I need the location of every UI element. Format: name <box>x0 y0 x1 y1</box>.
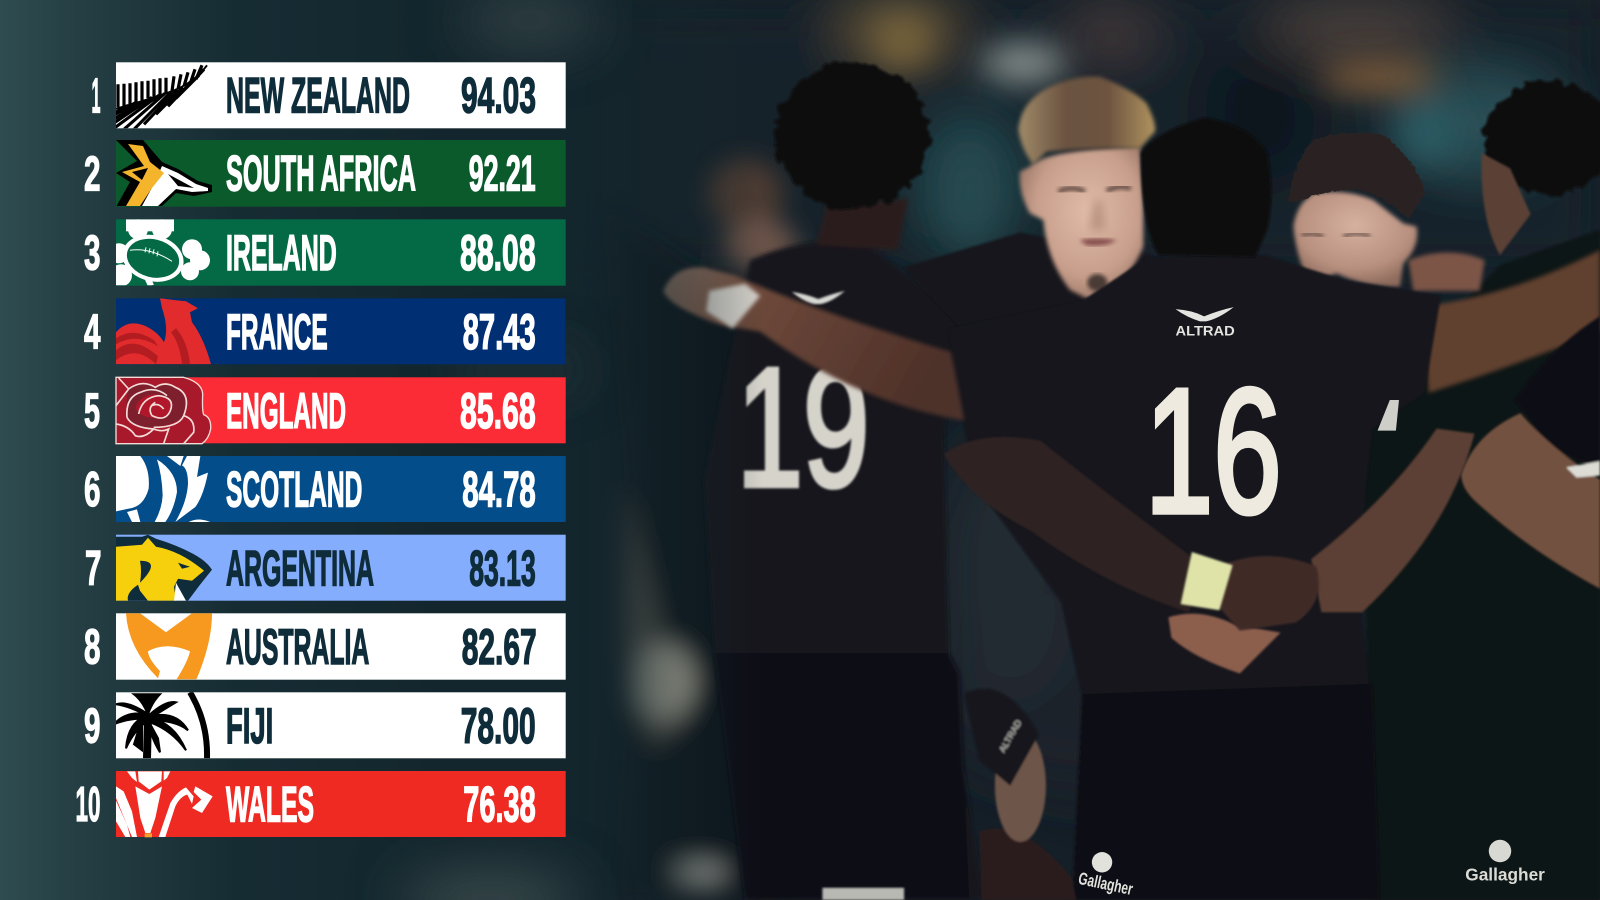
blurred left players <box>602 159 797 900</box>
bar <box>116 771 566 837</box>
right back player jersey <box>1362 230 1600 900</box>
icon: thistle <box>116 456 210 522</box>
score: 76.38 <box>463 776 536 832</box>
sponsor Gallagher centre <box>1077 852 1135 899</box>
icon: rooster <box>116 298 211 364</box>
lower hand <box>1168 614 1281 673</box>
upper right arm <box>1423 250 1600 393</box>
country name: FIJI <box>226 697 273 754</box>
hand over shoulder <box>1408 253 1485 291</box>
centre player 16 jersey <box>949 255 1441 900</box>
row 1: New Zealand: 1 <box>92 70 100 124</box>
sponsor ALTRAD: ALTRAD <box>1176 324 1235 340</box>
row 3: Ireland: IRELAND <box>226 224 337 281</box>
player 19 hair <box>774 62 930 209</box>
rank 9: 9 <box>84 700 100 754</box>
wrist band <box>1181 552 1233 610</box>
row 6: Scotland: SCOTLAND <box>226 460 362 518</box>
rank 2: 2 <box>84 148 100 202</box>
rank 7: 7 <box>85 542 102 596</box>
icon: red rose <box>116 377 211 444</box>
score: 85.68 <box>460 382 536 439</box>
row 2: South Africa <box>84 140 566 207</box>
row 10: Wales: 10 <box>76 778 100 832</box>
rank 3: 3 <box>84 226 100 280</box>
player 16 hair <box>1141 117 1271 257</box>
rank 5: 5 <box>84 384 100 438</box>
icon: silver fern <box>112 65 207 129</box>
bar <box>116 535 566 601</box>
logo Gallagher right <box>1465 840 1545 885</box>
score: 82.67 <box>462 618 537 675</box>
row 7: Argentina <box>85 535 566 601</box>
row 8: Australia <box>84 613 566 680</box>
row 5: England <box>84 377 566 444</box>
jersey number 19: 19 <box>737 333 869 522</box>
white kit hem <box>822 888 904 900</box>
bar <box>116 62 566 128</box>
arm across shoulders <box>663 267 964 420</box>
bar <box>116 456 566 522</box>
icon: palm tree <box>114 692 207 758</box>
row 3: Ireland <box>84 219 566 288</box>
score: 84.78 <box>462 460 536 518</box>
row 6: Scotland <box>84 456 566 522</box>
player 19 <box>704 199 982 900</box>
row 7: Argentina: ARGENTINA <box>226 540 374 596</box>
row 8: Australia: AUSTRALIA <box>226 618 369 675</box>
icon: shamrock <box>116 219 210 286</box>
jersey number 16: 16 <box>1145 351 1282 550</box>
right player head <box>1481 81 1600 255</box>
row 1: New Zealand <box>92 62 566 129</box>
soft highlights on panel <box>400 0 600 900</box>
lower left arm <box>944 437 1204 612</box>
bar <box>116 377 566 443</box>
wrist tape <box>706 284 760 329</box>
rank 6: 6 <box>84 463 100 517</box>
row 9: Fiji <box>84 692 566 758</box>
row 10: Wales: WALES <box>226 776 314 832</box>
bar <box>116 692 566 758</box>
score: 94.03 <box>461 66 536 124</box>
row 1: New Zealand: NEW ZEALAND <box>226 66 410 124</box>
ranking table <box>76 62 566 837</box>
bar <box>116 613 566 680</box>
icon: jaguar <box>116 535 212 601</box>
clasped hand <box>1214 556 1319 631</box>
row 4: France: FRANCE <box>226 303 328 360</box>
crouching figure: ALTRAD <box>997 718 1024 754</box>
row 10: Wales <box>76 771 566 837</box>
far right arm and sleeve <box>1461 316 1600 589</box>
crouching figure <box>964 689 1077 900</box>
score: 88.08 <box>460 224 536 281</box>
rank 8: 8 <box>84 620 100 674</box>
lower right arm <box>1311 429 1474 612</box>
score: 92.21 <box>469 145 536 202</box>
left panel gradient overlay <box>0 0 990 900</box>
layers above the faces <box>663 117 1600 900</box>
icon: springbok <box>116 140 212 207</box>
score: 78.00 <box>461 697 536 754</box>
country name: SOUTH AFRICA <box>226 145 416 202</box>
logo Gallagher right: Gallagher <box>1465 865 1545 885</box>
row 5: England: ENGLAND <box>226 382 346 439</box>
blonde player head <box>1018 76 1155 300</box>
young player head <box>1288 133 1425 287</box>
sponsor mark on player 19 <box>792 291 845 304</box>
sponsor ALTRAD <box>1176 307 1235 340</box>
icon: wallaby mask <box>126 613 212 680</box>
bar <box>116 298 566 364</box>
bar <box>116 219 566 286</box>
rank 4: 4 <box>84 306 100 360</box>
score: 83.13 <box>469 540 536 596</box>
score: 87.43 <box>463 303 536 360</box>
bar <box>116 140 566 207</box>
fern badge on sleeve <box>1378 400 1399 431</box>
icon: prince of wales feathers <box>116 771 213 837</box>
blonde player's jersey <box>903 233 1153 327</box>
row 4: France <box>84 298 566 364</box>
